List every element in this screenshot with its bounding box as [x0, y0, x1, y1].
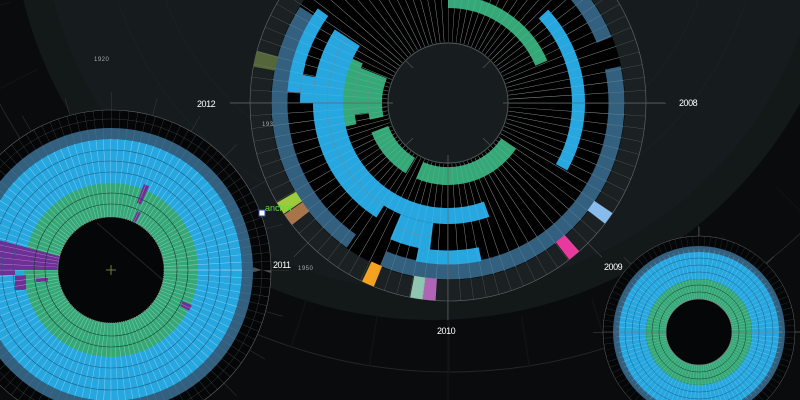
centre hole	[388, 43, 508, 163]
left wheel	[0, 101, 280, 400]
decade label 1920: 1920	[94, 57, 110, 63]
outer ticks	[0, 101, 280, 400]
decade label 193: 193	[262, 122, 274, 128]
black backing	[31, 190, 191, 350]
blue band	[2, 162, 220, 378]
green band	[41, 200, 181, 340]
blue arcs	[264, 0, 632, 287]
hole	[58, 217, 164, 323]
green band	[656, 289, 742, 375]
radial and ring lines	[625, 258, 773, 400]
green arcs	[327, 0, 569, 224]
year label 2008: 2008	[679, 98, 698, 108]
purple wedge and cells	[0, 161, 220, 379]
highlighted tick cells	[184, 0, 712, 367]
right wheel	[598, 227, 800, 400]
slate ring	[616, 250, 782, 400]
radial and ring lines	[0, 134, 247, 400]
decade label 1950: 1950	[298, 266, 314, 272]
slate ring	[0, 134, 248, 400]
main wheel	[184, 0, 712, 400]
ring dividers	[281, 0, 615, 270]
axis lines	[603, 227, 779, 332]
year label 2010: 2010	[437, 326, 456, 336]
year label 2011: 2011	[273, 260, 291, 270]
year label 2009: 2009	[604, 262, 623, 272]
outer ticks	[598, 231, 800, 400]
black field	[329, 0, 567, 222]
slate ring segments	[213, 0, 683, 338]
faint grid over cells	[240, 0, 656, 311]
centre cross	[106, 265, 116, 275]
tick ring	[250, 0, 646, 301]
blue band	[632, 266, 766, 398]
radial grid lines on black	[329, 0, 567, 222]
axis lines	[230, 103, 665, 400]
black backing	[651, 284, 747, 380]
anchor label: anchor	[265, 203, 293, 213]
year label 2012: 2012	[197, 99, 216, 109]
hole	[666, 299, 732, 365]
anchor handle	[259, 210, 265, 216]
